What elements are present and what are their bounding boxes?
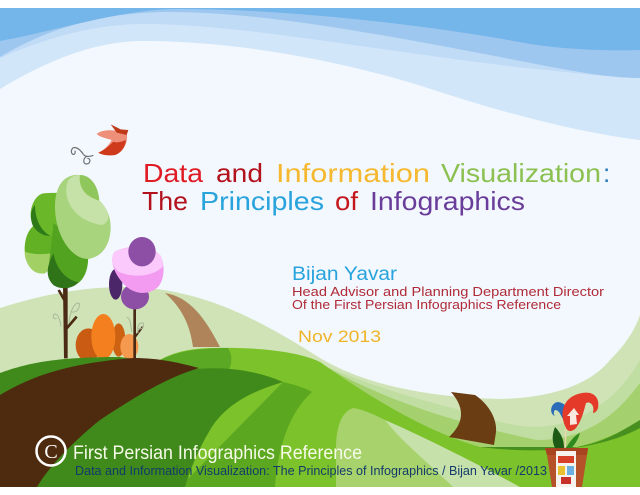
footer citation: Data and Information Visualization: The Principles of Infographics / Bijan Yavar /2013 [75, 464, 547, 478]
footer title: First Persian Infographics Reference [73, 443, 362, 464]
title line 1: Information [276, 158, 430, 188]
title line 2: Infographics [370, 186, 525, 216]
author role: Of the First Persian Infographics Reference [292, 297, 561, 312]
flower pot [545, 393, 598, 487]
crown lower left [24, 226, 50, 274]
purple tree [109, 237, 164, 358]
author role: Head Advisor and Planning Department Director [292, 284, 605, 299]
copyright mark [36, 436, 66, 466]
dark green left hill [0, 357, 130, 395]
sky base [0, 41, 640, 399]
title line 2: Principles [200, 186, 324, 216]
title line 1: Visualization [441, 158, 601, 188]
title line 1: Data [143, 158, 204, 188]
title line 1: and [216, 158, 263, 188]
pale overlay patches [336, 408, 520, 487]
trunk [53, 287, 79, 358]
dark green hill [37, 368, 283, 487]
bird [71, 124, 128, 164]
title line 1 [143, 158, 610, 188]
sky wave layers [0, 8, 640, 140]
right hill bands [330, 360, 640, 447]
pale road [165, 293, 220, 347]
title line 2: of [335, 186, 359, 216]
green tree [25, 175, 111, 358]
mid green hill [180, 382, 312, 487]
copyright mark: C [44, 441, 58, 463]
title [142, 158, 610, 216]
author role [292, 284, 605, 312]
crown main [55, 175, 111, 259]
brown hill [0, 358, 199, 487]
crown upper left [30, 192, 58, 225]
hump shade [160, 348, 232, 369]
title line 1: : [603, 158, 610, 188]
pale green hill [0, 287, 640, 427]
dark wedge at right [480, 420, 640, 450]
bright green hills [150, 348, 640, 487]
author name: Bijan Yavar [292, 264, 398, 285]
dark road [449, 392, 496, 445]
crown bottom [49, 223, 88, 287]
title line 2: The [142, 186, 188, 216]
date: Nov 2013 [298, 327, 381, 346]
title line 2 [142, 186, 525, 216]
orange bush [76, 314, 138, 362]
